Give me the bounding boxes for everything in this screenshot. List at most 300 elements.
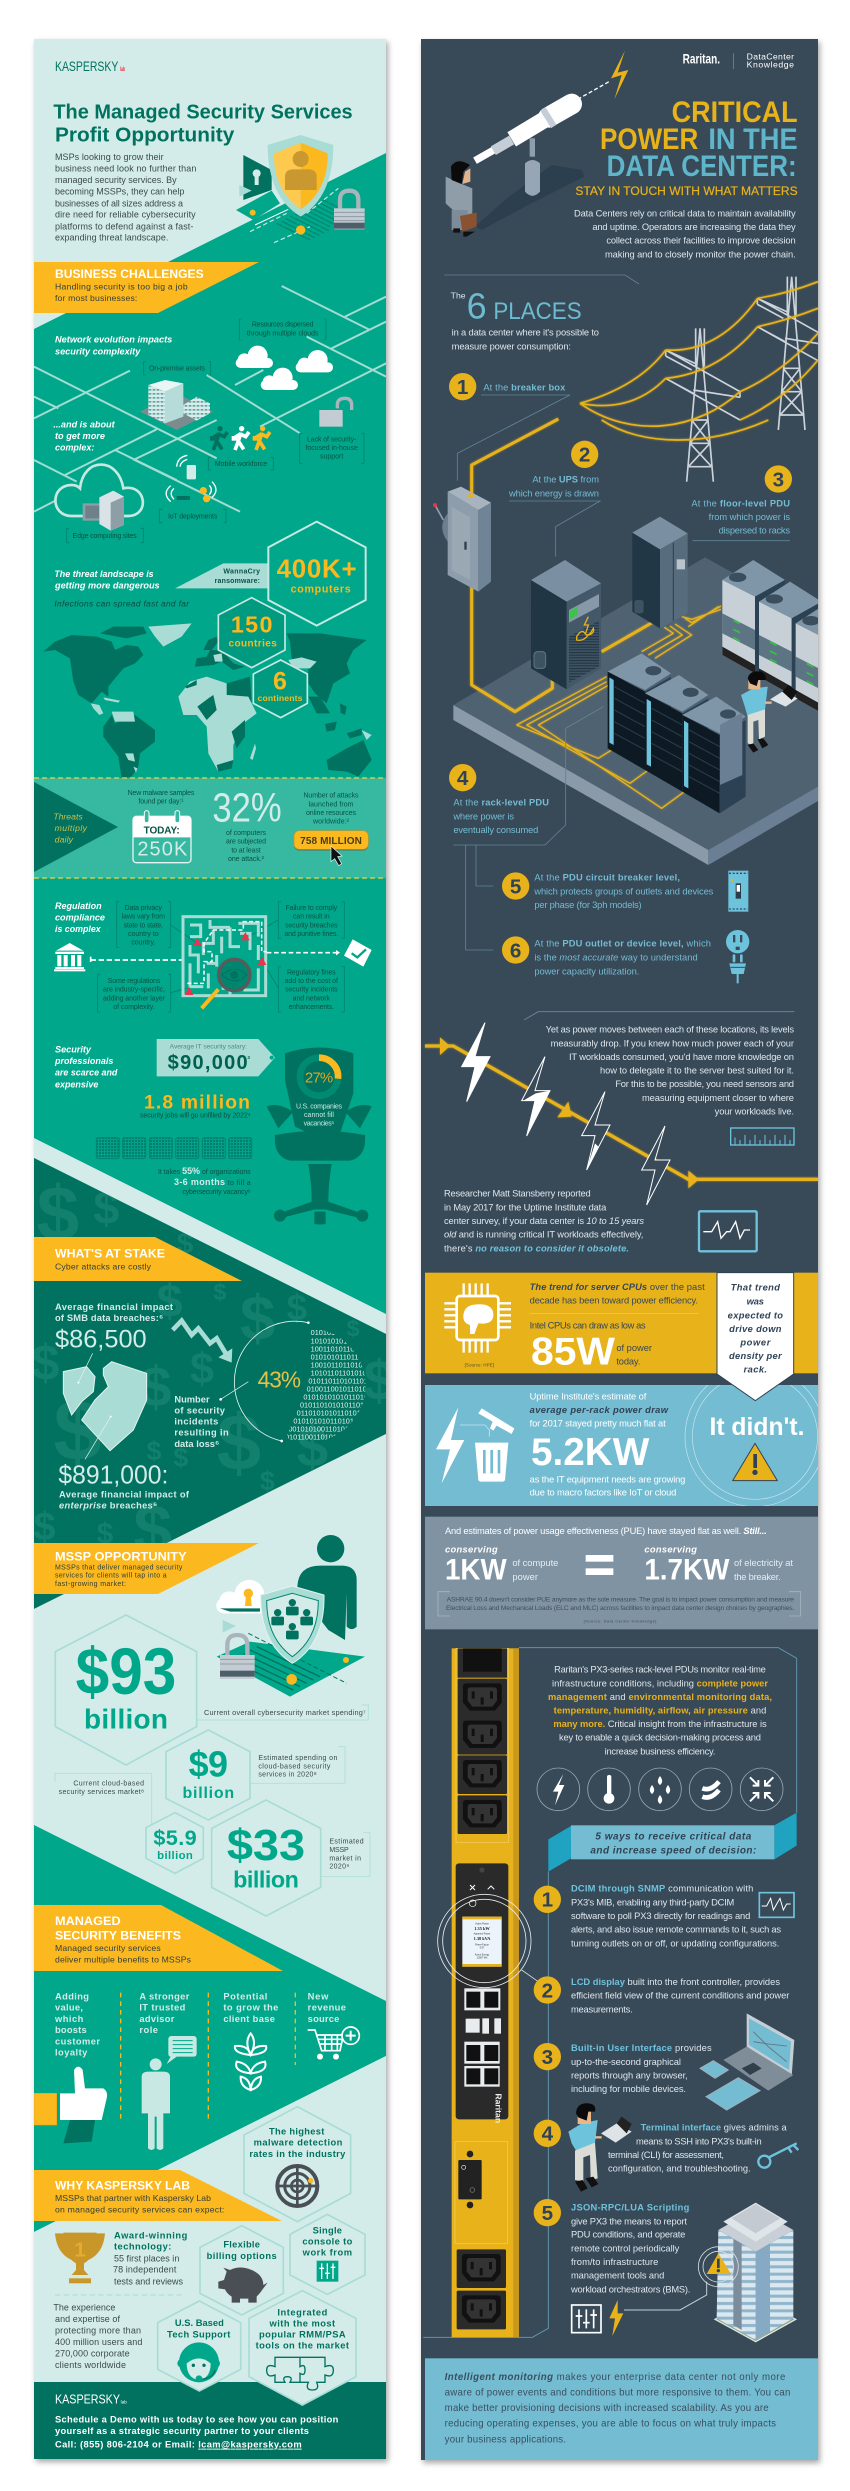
background dollar signs: $ (157, 1275, 183, 1327)
threats multiply band (34, 778, 386, 878)
callout: that trend was expected (717, 1273, 794, 1401)
background dollar signs: $ (287, 1287, 307, 1328)
footer: call to action: KASPERSKY (55, 2391, 120, 2406)
callout: regulatory fines: Regulatory fines (287, 969, 336, 976)
callout: failure to comply: can result in (293, 914, 330, 921)
text: Raritan PX3 intro: key to enable a quick decision-making process and (559, 1733, 761, 1743)
band: server CPU trend: Intel CPUs can draw as low as (530, 1321, 646, 1331)
rack PDU strip illustration: 1.35 kW (474, 1926, 490, 1931)
hexagon stat: $33 billion (212, 1800, 321, 1916)
way 5: JSON-RPC/LUA scripting: remote control periodically (571, 2243, 680, 2253)
logos: Raritan and Data Center Knowledge: DataCenter (747, 51, 794, 61)
text: power levels drop: how to delegate it to the server best suited for it. (600, 1066, 794, 1076)
threats multiply band: Threats (53, 811, 83, 821)
lightning bolts (462, 1023, 670, 1205)
main power cable (472, 419, 657, 712)
hexagon: RMM/PSA integration: tools on the market (256, 2341, 349, 2351)
label: cybersecurity market spending (197, 1705, 368, 1720)
way 2: LCD display: LCD display built into the front controller, provides (571, 1977, 780, 1987)
intro text (574, 208, 796, 259)
text: Raritan PX3 intro: many more. Critical insight from the infrastructure is (553, 1719, 767, 1729)
way 4: terminal interface (534, 2120, 787, 2174)
label 4: rack-level PDU: where power is (452, 812, 514, 822)
label: cloud-based spending (251, 1747, 345, 1783)
benefit: new revenue source: New (308, 1991, 329, 2001)
award-winning technology (55, 2230, 188, 2286)
label 4: rack-level PDU: At the rack-level PDU (453, 798, 549, 808)
text: Uptime Institute report: center survey, if your data center is 10 to 15 years (444, 1216, 644, 1226)
banner: managed security benefits: SECURITY BENEFITS (55, 1928, 181, 1942)
intro text: MSPs looking to grow their (55, 152, 164, 162)
band: intelligent monitoring conclusion: your business applications. (445, 2434, 566, 2445)
background dollar signs: $ (217, 1398, 261, 1487)
price tag: average salary: $90,000 (168, 1052, 248, 1074)
ribbon: 5 ways (548, 1813, 797, 1872)
icon: government building (54, 943, 85, 971)
way 5: JSON-RPC/LUA scripting: PDU conditions, and operate (571, 2230, 685, 2240)
stat: SMB breach cost: Average financial impact (55, 1302, 173, 1312)
banner: managed security benefits: Managed security services (55, 1943, 161, 1953)
label: MSSP market: Estimated (329, 1839, 364, 1846)
hexagon: malware detection (244, 2107, 351, 2222)
office chair with 27% stat: 27% (305, 1069, 333, 1086)
hexagon stat: $93 billion: $93 (76, 1634, 176, 1708)
hexagon: US tech support (158, 2301, 241, 2391)
icon: sliders and bolt (572, 2282, 707, 2336)
intro text: expanding threat landscape. (55, 233, 168, 243)
dashed path to maze (90, 956, 182, 962)
award-winning technology: tests and reviews (114, 2276, 183, 2286)
label 6: outlet or device level: is the most accurate way to understand (534, 953, 698, 963)
label 3: floor-level PDU: from which power is (709, 512, 790, 522)
dashed divider line and experience text (53, 2295, 185, 2370)
stat: 758 million attacks (294, 793, 368, 866)
rack PDU strip illustration: Active Energy (475, 1953, 490, 1956)
hexagon: malware detection: rates in the industry (249, 2149, 346, 2159)
stat: 3-6 months: cybersecurity vacancy⁶ (182, 1189, 251, 1196)
logos: Raritan and Data Center Knowledge: Raritan. (683, 50, 720, 66)
label: current cloud-based market: security services market⁸ (59, 1789, 144, 1796)
text: Uptime Institute report: in May 2017 for the Uptime Institute data (444, 1202, 607, 1212)
band: per-rack power draw: due to macro factors like IoT or cloud (530, 1488, 676, 1498)
rack PDU strip illustration: Power Factor (475, 1943, 489, 1946)
callout: regulatory fines: add to the cost of (285, 978, 338, 985)
server cabinets (722, 560, 850, 717)
background dollar signs: $ (53, 1383, 102, 1479)
breaker box (433, 487, 491, 592)
callout: industry-specific: adding another layer (103, 995, 166, 1002)
label: cloud-based spending: services in 2020⁸ (258, 1772, 317, 1779)
benefit: trusted advisor (139, 1991, 197, 2150)
text: Uptime Institute report (444, 1189, 644, 1253)
label: MSSP market (321, 1833, 370, 1877)
hexagon: flexible billing: billing options (207, 2251, 277, 2261)
intro text: Data Centers rely on critical data to maintain availability (574, 208, 796, 218)
way 3: built-in user interface: Built-in User Interface provides (571, 2043, 712, 2053)
hexagon stat: $9 billion: $9 (189, 1744, 228, 1785)
title (53, 102, 353, 146)
heading: network evolution: Network evolution impacts (55, 335, 172, 345)
label: resources dispersed, clouds: Resources dispersed (252, 322, 314, 329)
banner: managed security benefits: MANAGED (55, 1914, 121, 1928)
pie chart: 43%: 0100110010110101 (307, 1384, 371, 1393)
intro text: and uptime. Operators are increasing the data they (592, 222, 796, 232)
text: number of incidents (174, 1382, 248, 1449)
benefit: customer loyalty: loyalty (55, 2048, 88, 2058)
rack PDU strip illustration: Active Power (475, 1923, 489, 1926)
way 1: DCIM through SNMP: 1 (542, 1889, 553, 1912)
heading: the 6 places (451, 285, 599, 352)
hexagon: RMM/PSA integration: Integrated (277, 2307, 328, 2317)
illustration: shield with person and padlock (236, 135, 365, 243)
stat: 758 million attacks: online resources (306, 810, 356, 817)
text: regulation compliance: compliance (55, 913, 105, 923)
way 5: JSON-RPC/LUA scripting: JSON-RPC/LUA Scripting (571, 2203, 690, 2213)
band: intelligent monitoring conclusion: Intelligent monitoring makes your enterprise data center not only more (445, 2372, 785, 2383)
hexagon: flexible billing: Flexible (223, 2240, 260, 2250)
stat: 758 million attacks: Number of attacks (303, 793, 359, 800)
banner: managed security benefits (34, 1905, 283, 1971)
footer: call to action: yourself as a strategic security partner to your clients (55, 2426, 309, 2436)
hexagon stat: 400K+ computers: WannaCry (223, 568, 260, 575)
callout: industry-specific (98, 974, 187, 1012)
banner: what's at stake (34, 1237, 242, 1281)
hexagon: flexible billing (200, 2226, 283, 2315)
pie chart: 43%: 1001011011010101 (311, 1360, 375, 1369)
rack PDU strip illustration: Raritan (494, 2093, 504, 2123)
banner: business challenges: Handling security is too big a job (55, 281, 188, 291)
stat: 1.8 million: 1.8 million (144, 1092, 250, 1113)
rack cabinets (608, 653, 746, 813)
band: PUE conserving comparison: conserving (445, 1544, 498, 1554)
title: Profit Opportunity (55, 124, 234, 146)
text: Uptime Institute report: Researcher Matt Stansberry reported (444, 1189, 591, 1199)
rack PDU strip illustration: 0.97 (480, 1948, 485, 1950)
stat: enterprise breach cost (58, 1459, 190, 1510)
benefit: new revenue source: source (308, 2014, 339, 2024)
band: PUE conserving comparison: ASHRAE 90.4 doesn't consider PUE anymore as the sole measure. The goal is to impact power consumption and measure (447, 1596, 794, 1603)
open padlock, lack of support label: Lack of security- (307, 436, 357, 443)
icon: monitor pulse (699, 1211, 757, 1251)
text: power levels drop: For this to be possible, you need sensors and (615, 1079, 794, 1089)
banner: managed security benefits: deliver multiple benefits to MSSPs (55, 1954, 192, 1964)
text: regulation compliance: is complex (55, 924, 101, 934)
way 3: built-in user interface: reports through any browser, (571, 2070, 688, 2080)
callout: that trend was expected: density per (729, 1351, 783, 1361)
label 2: UPS: which energy is drawn (508, 488, 599, 498)
intro text: managed security services. By (55, 175, 177, 185)
pie chart: 43%: 0101010101010101 (311, 1328, 376, 1337)
banner: business challenges: BUSINESS CHALLENGES (55, 267, 204, 281)
background dollar signs: $ (133, 1490, 172, 1568)
stat: malware samples calendar: New malware samples (128, 790, 195, 797)
callout: data privacy: country. (131, 940, 155, 947)
hexagon stat: 400K+ computers (175, 522, 366, 626)
hexagon stat: $5.9 billion (146, 1813, 203, 1873)
band: server CPU trend: today. (616, 1357, 640, 1367)
banner: MSSP opportunity: services for clients will tap into a (55, 1573, 167, 1580)
thin wires to racks (517, 606, 721, 808)
world map (43, 623, 372, 778)
text: Raritan PX3 intro (548, 1664, 772, 1756)
hexagon: single console: work from (302, 2248, 352, 2258)
way 1: DCIM through SNMP: PX3's MIB, enabling any third-party DCIM (571, 1897, 734, 1907)
hexagon: RMM/PSA integration (249, 2291, 356, 2405)
title: The Managed Security Services (53, 102, 353, 124)
heading: network evolution: security complexity (55, 346, 141, 356)
illustration: office building with alert (698, 2203, 796, 2342)
office chair with 27% stat (267, 1047, 372, 1224)
text: number of incidents: Number (174, 1394, 210, 1404)
logos: Raritan and Data Center Knowledge: Knowledge (747, 59, 794, 69)
way 5: JSON-RPC/LUA scripting: workload orchestrators (BMS). (570, 2284, 690, 2294)
way 2: LCD display: measurements. (571, 2004, 633, 2014)
text: Raritan PX3 intro: infrastructure conditions, including complete power (552, 1678, 768, 1688)
text: power levels drop: Yet as power moves between each of these locations, its levels (546, 1025, 794, 1035)
pie chart: 43%: 01010101010110101 (303, 1392, 372, 1401)
illustration: man with telescope and lightning (446, 51, 628, 237)
label 5: circuit breaker level (502, 872, 714, 910)
illustration: person, shield, cloud, padlock (216, 1535, 365, 1697)
label 4: rack-level PDU: eventually consumed (453, 825, 538, 835)
pie chart: 43%: 01011001101010101 (285, 1432, 353, 1441)
way 3: built-in user interface: including for mobile devices. (571, 2084, 686, 2094)
way 5: JSON-RPC/LUA scripting (534, 2199, 690, 2294)
text: power levels drop: your workloads live. (715, 1106, 794, 1116)
open padlock, lack of support label (300, 398, 364, 463)
stat: malware samples calendar: TODAY: (144, 825, 180, 836)
hexagon: single console (290, 2214, 365, 2294)
dashed divider line and experience text: protecting more than (55, 2325, 141, 2335)
banner: what's at stake: Cyber attacks are costly (55, 1261, 152, 1271)
stat: malware samples calendar: 250K (137, 839, 188, 861)
stat: 32% of computers: are subjected (226, 838, 266, 845)
rack PDU strip illustration: Apparent Power (474, 1933, 491, 1936)
hexagon stat: 6 continents (253, 660, 307, 718)
stat: 32% of computers: of computers (226, 830, 266, 837)
title (575, 96, 798, 198)
text: power levels drop: measuring equipment closer to where (642, 1093, 794, 1103)
band: intelligent monitoring conclusion: aware of power events and conditions but more responsive to them. You can (445, 2388, 790, 2399)
icon: circuit breaker (728, 871, 748, 912)
band: server CPU trend: The trend for server CPUs over the past (530, 1282, 705, 1292)
icons: edge computing cloud and server: Edge computing sites (73, 533, 137, 540)
banner: why kaspersky lab: on managed security services can expect: (55, 2205, 224, 2215)
text: threat landscape: Infections can spread fast and far (54, 599, 190, 609)
band: per-rack power draw: average per-rack power draw (530, 1405, 669, 1415)
managed benefits green section (34, 1825, 386, 2232)
benefit: customer loyalty (34, 1991, 107, 2143)
label 3: floor-level PDU: 3 (773, 468, 784, 491)
stat: 3-6 months (158, 1166, 251, 1196)
callout: it didn't, with warning icon (685, 1367, 825, 1507)
open padlock, lack of support label: focused in-house (305, 445, 358, 452)
text: Uptime Institute report: old and is running critical IT workloads effectively, (444, 1230, 643, 1240)
threats multiply band: multiply (55, 823, 88, 833)
light market section (34, 1434, 386, 1609)
hexagon: malware detection: The highest (269, 2126, 324, 2136)
stat: 32% of computers: to at least (231, 847, 261, 854)
pie chart: 43%: 1010110110101010 (311, 1368, 375, 1377)
award-winning technology: technology: (114, 2242, 171, 2252)
callout: data privacy: state to state, (124, 922, 163, 929)
callout: data privacy: country to (128, 931, 159, 938)
text: number of incidents: of security (174, 1405, 226, 1415)
background dollar signs: $ (363, 1350, 395, 1413)
icon: laptop and tablets (700, 2013, 794, 2110)
callout: that trend was expected: drive down (729, 1324, 782, 1334)
way 5: JSON-RPC/LUA scripting: 5 (542, 2202, 553, 2225)
pie chart: 43%: 0101101101011010 (308, 1376, 372, 1385)
text: security professionals: expensive (55, 1079, 98, 1089)
band: per-rack power draw: as the IT equipment needs are growing (530, 1474, 685, 1484)
text: Raritan PX3 intro: Raritan's PX3-series rack-level PDUs monitor real-time (554, 1664, 766, 1674)
way 1: DCIM through SNMP: alerts, and also issue remote commands to it, such as (571, 1925, 781, 1935)
text: and is about to get more complex (53, 419, 116, 452)
band: intelligent monitoring conclusion: reducing operating expenses, you are able to focus on what truly impacts (445, 2419, 776, 2430)
hexagon stat: $93 billion (55, 1615, 197, 1765)
benefit: trusted advisor: IT trusted (139, 2003, 186, 2013)
background dollar signs: $ (260, 1466, 275, 1496)
heading: network evolution (55, 335, 172, 356)
technician with laptop (741, 671, 798, 753)
band: PUE conserving comparison: of electricity at (734, 1558, 793, 1568)
benefit: grow the client base (223, 1991, 278, 2090)
label 6: outlet or device level: 6 (510, 939, 521, 962)
text: threat landscape (54, 569, 190, 609)
frame around PDU section (423, 1648, 797, 2337)
callout: regulatory fines: security incidents (285, 987, 338, 994)
intro text: dire need for reliable cybersecurity (55, 210, 196, 220)
benefit: grow the client base: Potential (223, 1991, 267, 2001)
benefit: new revenue source: revenue (308, 2003, 346, 2013)
callout: failure to comply: and punitive fines. (284, 931, 338, 938)
footer: call to action (55, 2391, 339, 2450)
text: and is about to get more complex: to get more (55, 431, 105, 441)
banner: MSSP opportunity: MSSPs that deliver managed security (55, 1564, 183, 1571)
label: MSSP market: MSSP (329, 1847, 349, 1854)
hexagon stat: $9 billion: billion (182, 1785, 234, 1802)
office chair with 27% stat: cannot fill (304, 1112, 334, 1119)
way 4: terminal interface: Terminal interface gives admins a (641, 2123, 787, 2133)
stat: 3-6 months: 3-6 months to fill a (174, 1177, 251, 1187)
way 5: JSON-RPC/LUA scripting: give PX3 the means to report (571, 2216, 687, 2226)
text: regulation compliance (55, 901, 105, 934)
price tag: average salary (157, 1039, 275, 1076)
text: number of incidents: data loss⁶ (174, 1439, 219, 1449)
pie chart: 43% (234, 1321, 376, 1442)
way 4: terminal interface: 4 (542, 2123, 554, 2146)
label: cloud-based spending: cloud-based security (258, 1763, 331, 1770)
label 5: circuit breaker level: per phase (for 3ph models) (534, 900, 642, 910)
callout: failure to comply: security breaches (285, 922, 338, 929)
hexagon: US tech support: Tech Support (167, 2329, 230, 2339)
label 6: outlet or device level: At the PDU outlet or device level, which (534, 939, 711, 949)
power drop line with arrows (425, 1037, 818, 1188)
stat: SMB breach cost: of SMB data breaches:⁶ (55, 1313, 163, 1323)
logos: Raritan and Data Center Knowledge (683, 50, 794, 69)
pie chart: 43%: 1010101010101010 (311, 1336, 376, 1345)
label 6: outlet or device level: power capacity utilization. (534, 966, 639, 976)
icons: IoT deployments (159, 482, 226, 523)
pie chart: 43%: 0101010110110101 (311, 1352, 375, 1361)
background dollar signs: $ (93, 1181, 119, 1233)
network diagram lines (34, 286, 386, 512)
benefit: customer loyalty: boosts (55, 2025, 87, 2035)
stat: 1.8 million: security jobs will go unfilled by 2022⁴ (140, 1112, 251, 1119)
maze with magnifier (183, 917, 340, 1008)
label 1: breaker box: 1 (457, 376, 468, 399)
label: current cloud-based market: Current cloud-based (73, 1781, 144, 1788)
label 5: circuit breaker level: which protects groups of outlets and devices (533, 886, 714, 896)
hexagon stat: 6 continents: 6 (273, 667, 287, 695)
why kaspersky light section (34, 2056, 386, 2232)
background dollar signs: $ (147, 1436, 162, 1466)
band: per-rack power draw (425, 1385, 818, 1506)
UPS unit (531, 560, 601, 689)
rack PDU strip illustration: 1.38 kVA (474, 1936, 491, 1941)
text: Uptime Institute report: there's no reason to consider it obsolete. (444, 1243, 629, 1253)
banner: what's at stake: WHAT'S AT STAKE (55, 1246, 165, 1260)
benefit: customer loyalty: value, (55, 2003, 83, 2013)
way 1: DCIM through SNMP: software to poll PX3 directly for readings and (571, 1911, 750, 1921)
icons: five monitoring metrics (537, 1768, 783, 1811)
way 2: LCD display: 2 (542, 1979, 553, 2002)
callout: that trend was expected: was (747, 1297, 764, 1307)
intro text: becoming MSSPs, they can help (55, 187, 184, 197)
text: power levels drop: IT workloads consumed, you'd have more knowledge on (569, 1052, 794, 1062)
hexagon stat: 400K+ computers: computers (291, 584, 351, 596)
office chair with 27% stat: U.S. companies (296, 1103, 342, 1110)
logo: Kaspersky (56, 62, 125, 71)
stat: 758 million attacks: worldwide:² (312, 819, 350, 826)
callout: it didn't, with warning icon: It didn't. (709, 1413, 804, 1441)
hexagon stat: $33 billion: $33 (227, 1822, 305, 1870)
banner: why kaspersky lab: MSSPs that partner with Kaspersky Lab (55, 2193, 211, 2203)
intro text: platforms to defend against a fast- (55, 221, 193, 231)
callout: industry-specific: are industry-specific, (103, 987, 165, 994)
title: DATA CENTER: (607, 150, 797, 183)
diagonal stripe (34, 1138, 386, 1334)
benefit: trusted advisor: A stronger (139, 1991, 190, 2001)
text: number of incidents: incidents (174, 1417, 218, 1427)
heading: the 6 places: measure power consumption: (452, 342, 571, 352)
label 2: UPS: At the UPS from (532, 474, 599, 484)
band: server CPU trend: of power (616, 1343, 652, 1353)
heading: the 6 places: 6 (467, 285, 487, 326)
label 6: outlet or device level (502, 936, 711, 976)
zigzag arrow (173, 1321, 232, 1363)
label 2: UPS (508, 441, 600, 557)
callout: data privacy: Data privacy (125, 905, 162, 912)
text: and is about to get more complex: ...and is about (53, 419, 116, 429)
background dollar signs: $ (97, 1517, 114, 1550)
footer: call to action: Schedule a Demo with us today to see how you can position (55, 2415, 339, 2425)
ribbon: 5 ways: and increase speed of decision: (590, 1845, 756, 1856)
callout: regulatory fines: and network (293, 995, 330, 1002)
stat: SMB breach cost: $86,500 (55, 1325, 147, 1353)
background dollar signs: $ (33, 1505, 56, 1549)
benefit: grow the client base: client base (223, 2014, 275, 2024)
way 3: built-in user interface (534, 2043, 712, 2094)
floor platform (453, 557, 818, 865)
way 4: terminal interface: means to SSH into PX3's built-in (636, 2136, 762, 2146)
icon: outlet and plug (726, 930, 749, 983)
icon: ruler (731, 1128, 794, 1145)
callout: data privacy (117, 902, 195, 947)
way 5: JSON-RPC/LUA scripting: management tools and (571, 2271, 664, 2281)
callout: industry-specific: Some regulations (108, 978, 161, 985)
